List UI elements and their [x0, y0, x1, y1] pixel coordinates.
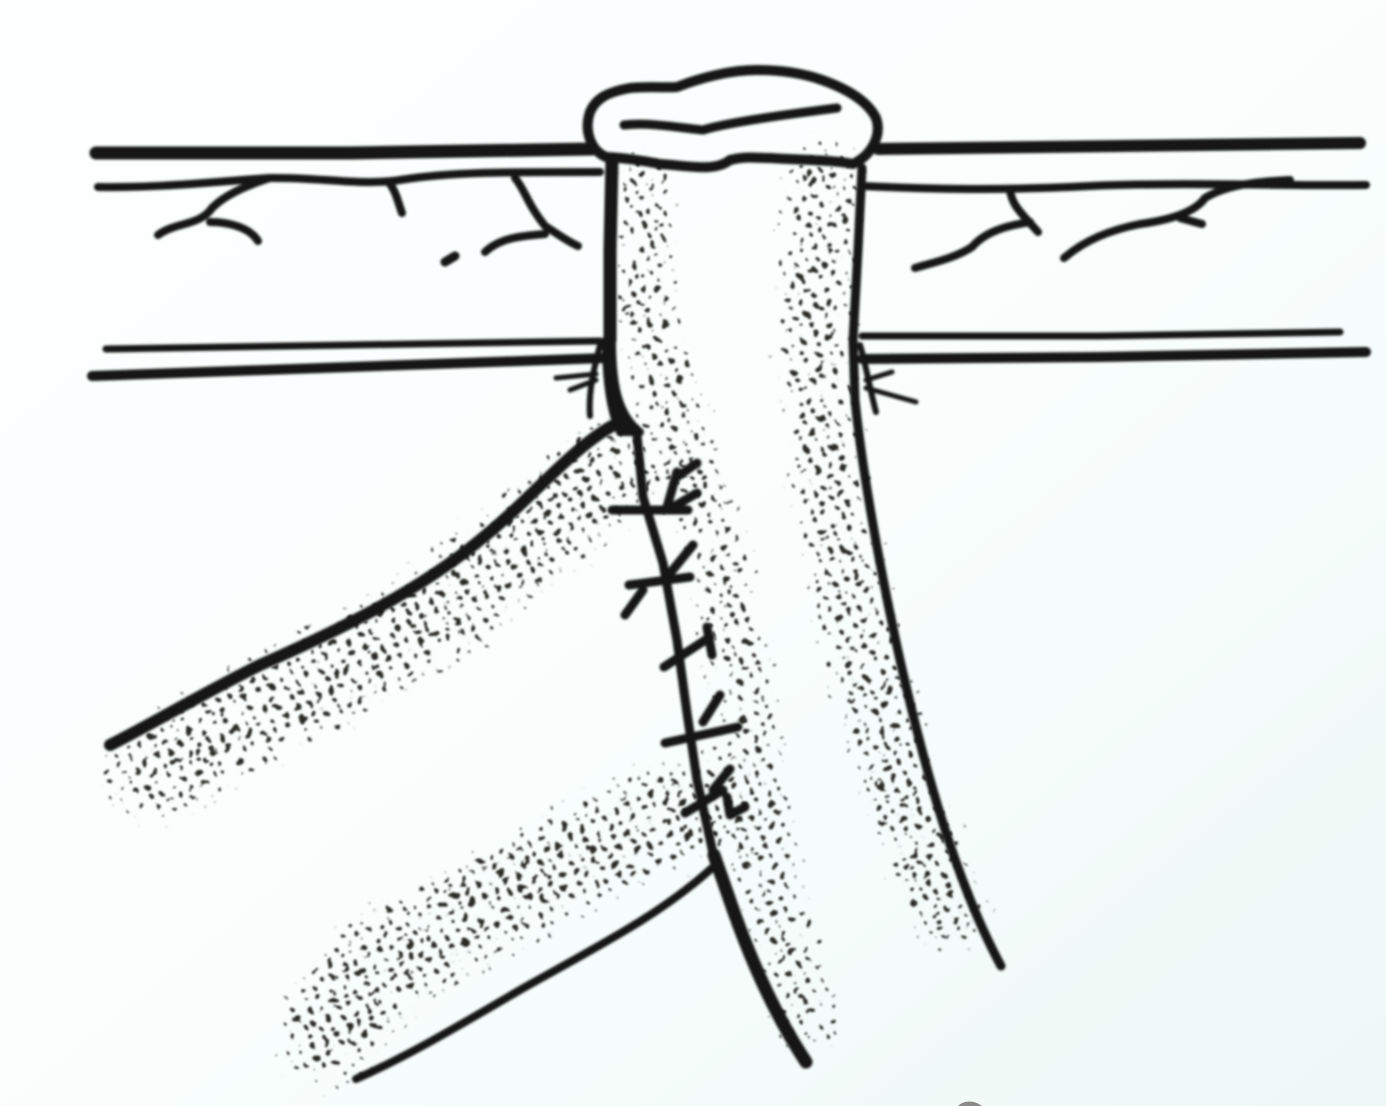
- bottom edge mark: [958, 1102, 982, 1106]
- anastomosis stitches: [612, 463, 745, 815]
- branch lower edge: [356, 868, 712, 1079]
- fascia sutures right: [860, 345, 916, 412]
- subcutaneous line left with branches: [98, 172, 600, 262]
- fascia lines left: [92, 341, 606, 376]
- vessel seam and lower left wall: [637, 435, 806, 1062]
- subcutaneous line right with branches: [862, 180, 1366, 268]
- skin surface line left: [96, 149, 592, 153]
- vessel right wall: [853, 168, 1001, 966]
- fascia lines right: [862, 332, 1366, 359]
- vessel left wall: [610, 160, 612, 340]
- fascia sutures left: [556, 345, 600, 416]
- thick junction shadow: [606, 340, 640, 432]
- stippled shading: [102, 140, 996, 1098]
- stump cuff: [588, 70, 878, 167]
- branch upper edge: [110, 426, 612, 745]
- skin surface line right: [878, 143, 1360, 149]
